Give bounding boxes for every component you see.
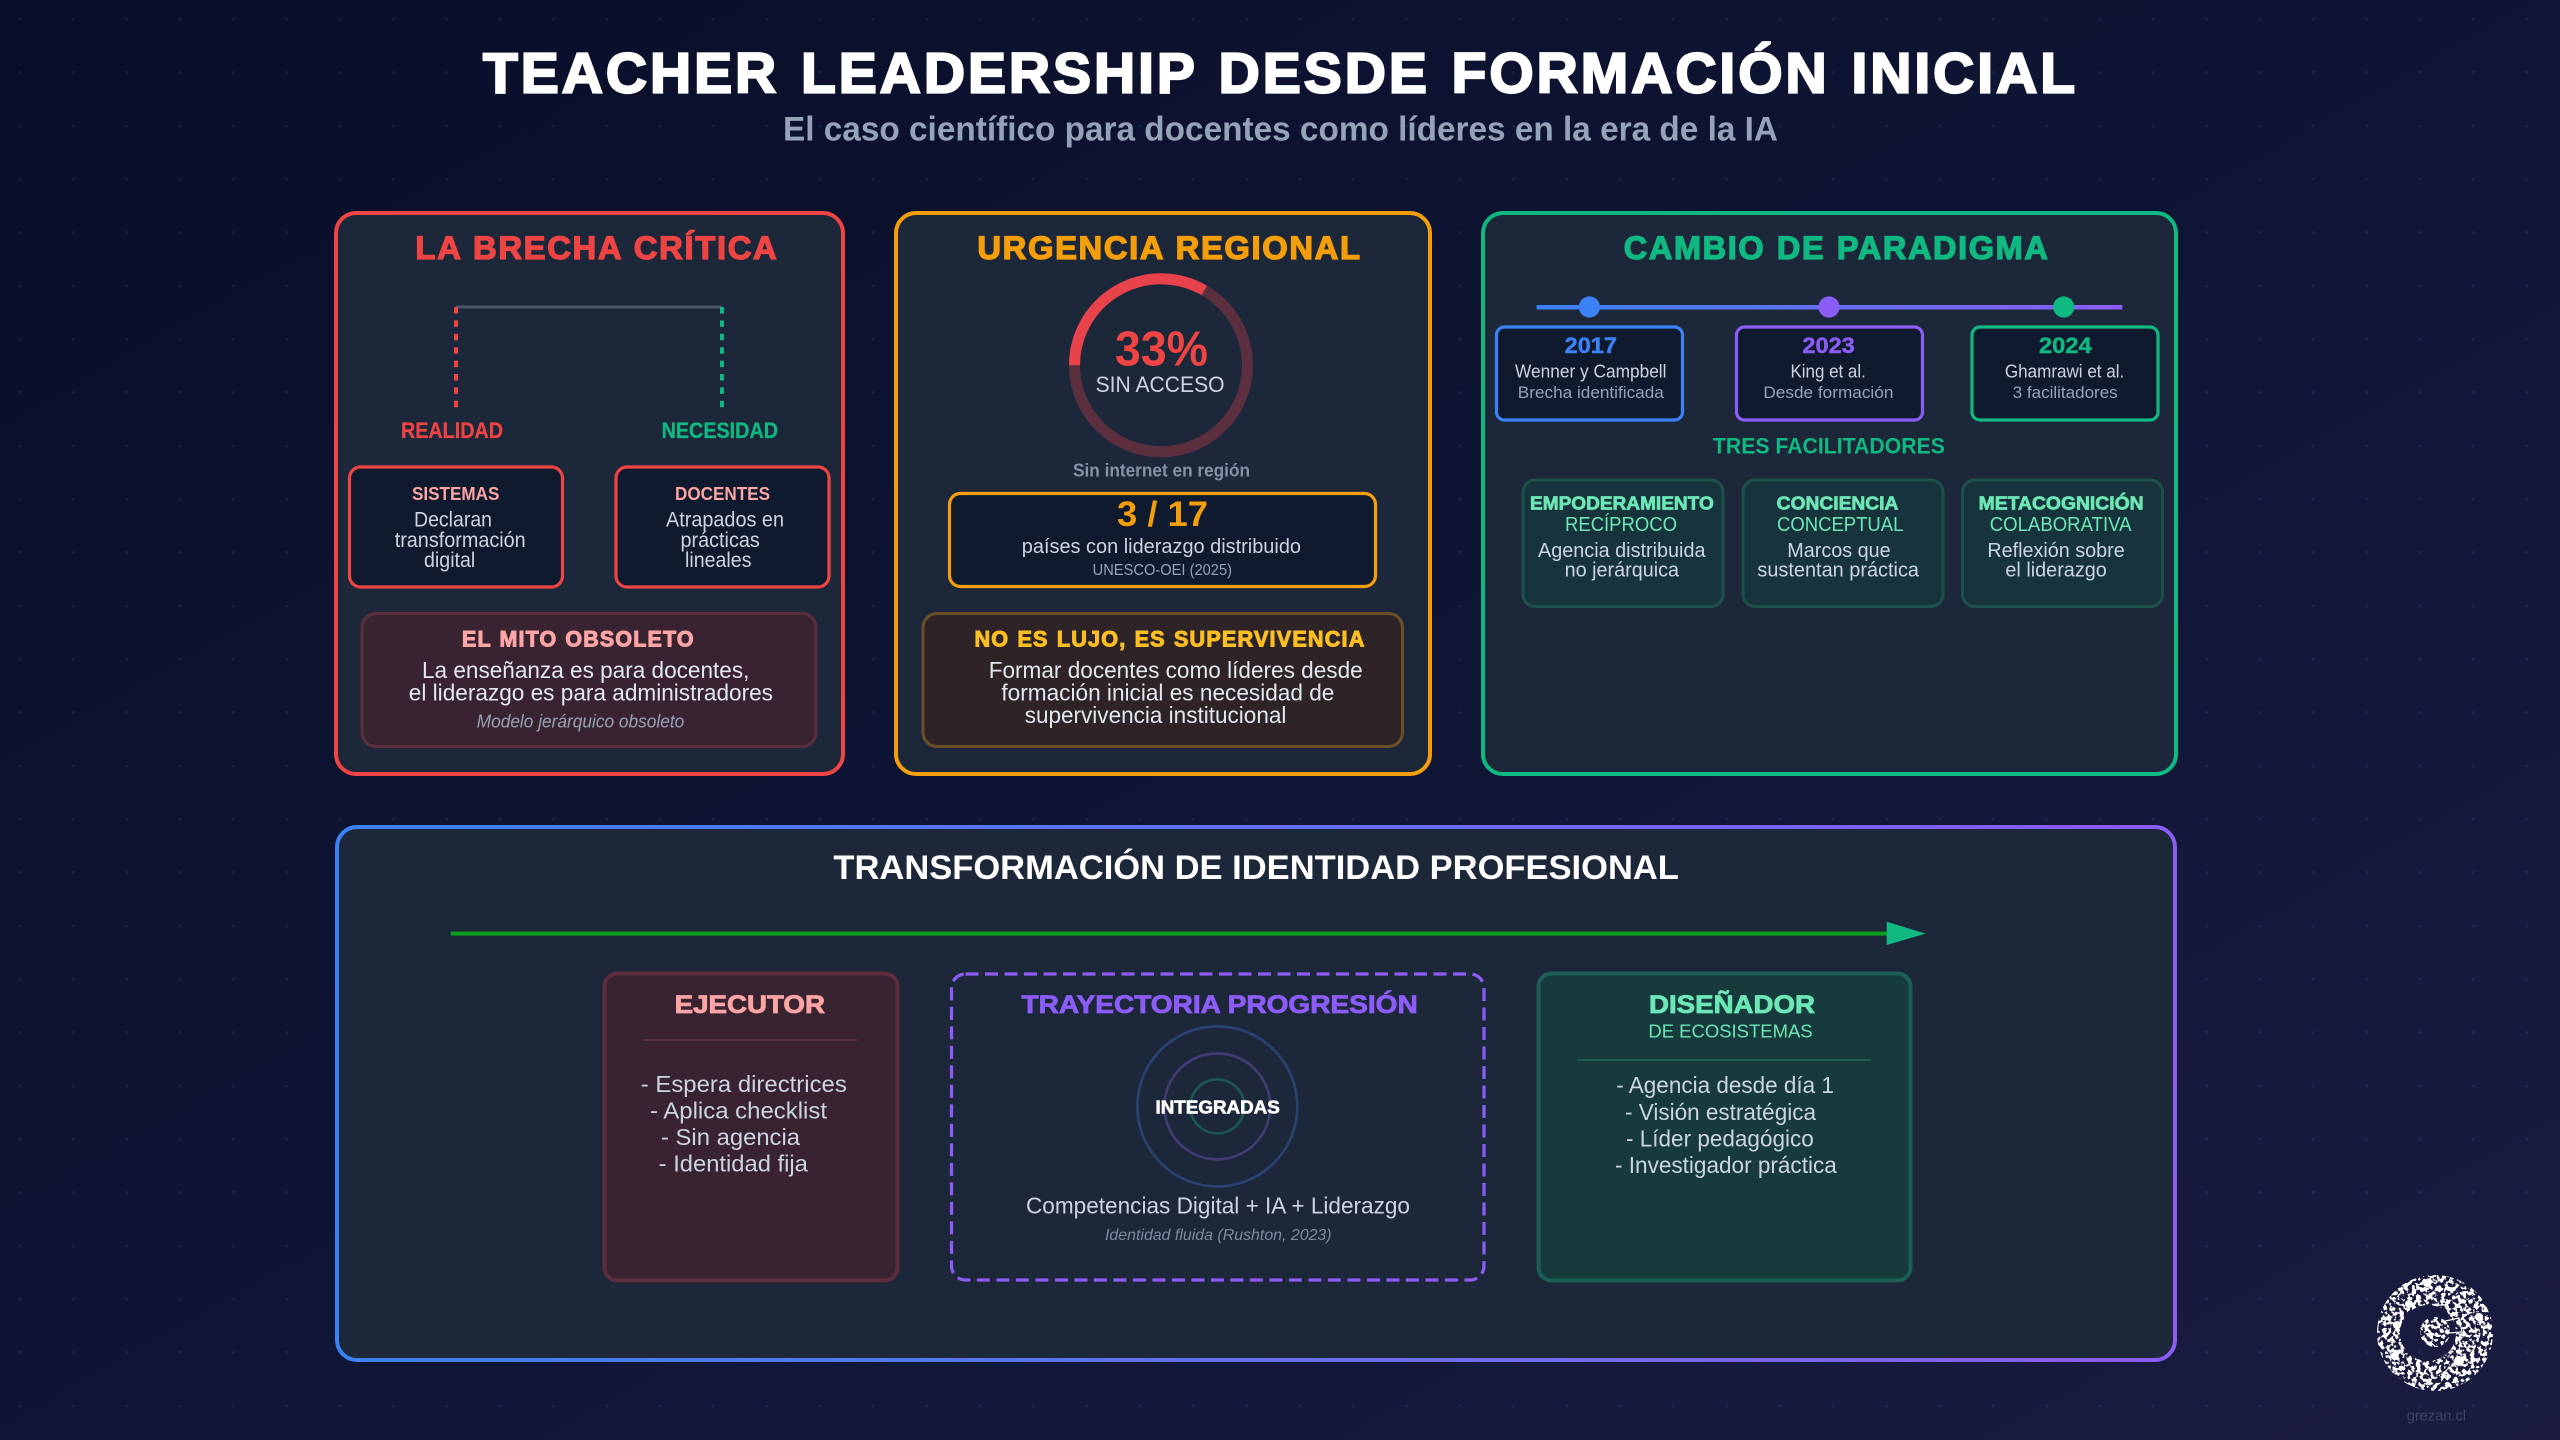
card: sistemas <box>350 467 562 587</box>
card: empoderamiento: Agencia distribuida <box>1538 540 1706 562</box>
card: trayectoria progresión <box>952 974 1484 1280</box>
stat card: 3 / 17: países con liderazgo distribuido <box>1022 536 1301 558</box>
donut chart: 33% <box>1074 279 1248 452</box>
card: empoderamiento <box>1523 480 1723 606</box>
timeline card: 2023: 2023 <box>1802 333 1855 358</box>
label: realidad: REALIDAD <box>401 418 503 443</box>
card: trayectoria progresión: TRAYECTORIA PROGRESIÓN <box>1022 989 1418 1019</box>
callout: el mito obsoleto: La enseñanza es para docentes, <box>422 657 749 683</box>
panel: transformación de identidad <box>337 827 2175 1360</box>
stat card: 3 / 17 <box>950 494 1376 586</box>
heading: la brecha crítica: LA BRECHA CRÍTICA <box>415 230 778 266</box>
timeline card: 2024: 2024 <box>2039 333 2093 358</box>
callout: no es lujo: supervivencia institucional <box>1025 702 1286 728</box>
card: docentes <box>616 467 829 587</box>
card: sistemas: Declaran <box>414 509 492 532</box>
timeline card: 2023 <box>1736 327 1922 420</box>
card: diseñador: DISEÑADOR <box>1649 989 1815 1019</box>
callout: no es lujo: formación inicial es necesidad de <box>1001 680 1334 706</box>
card: ejecutor <box>604 974 898 1280</box>
card: diseñador <box>1538 974 1910 1280</box>
card: metacognición: Reflexión sobre <box>1987 540 2125 562</box>
arrow: progression <box>451 922 1926 945</box>
card: empoderamiento: RECÍPROCO <box>1565 513 1677 536</box>
card: trayectoria progresión: Identidad fluida (Rushton, 2023) <box>1105 1227 1332 1244</box>
card: conciencia: CONCIENCIA <box>1777 492 1898 513</box>
subheading: tres facilitadores: TRES FACILITADORES <box>1713 434 1945 459</box>
card: docentes: lineales <box>685 549 752 572</box>
card: sistemas: digital <box>424 549 475 572</box>
heading: urgencia regional: URGENCIA REGIONAL <box>977 230 1362 266</box>
callout: el mito obsoleto: EL MITO OBSOLETO <box>462 626 695 651</box>
card: ejecutor: - Aplica checklist <box>650 1098 828 1124</box>
timeline card: 2017: 2017 <box>1565 333 1617 358</box>
title: TEACHER LEADERSHIP DESDE FORMACIÓN INICIAL <box>483 42 2078 106</box>
timeline card: 2017: Brecha identificada <box>1518 383 1664 402</box>
card: empoderamiento: no jerárquica <box>1565 559 1680 581</box>
stat card: 3 / 17: 3 / 17 <box>1117 495 1208 534</box>
card: diseñador: - Líder pedagógico <box>1626 1125 1814 1151</box>
caption: sin internet: Sin internet en región <box>1073 461 1250 481</box>
card: conciencia <box>1743 480 1943 606</box>
callout: no es lujo <box>923 614 1402 746</box>
heading: transformación de identidad profesional: TRANSFORMACIÓN DE IDENTIDAD PROFESIONAL <box>833 849 1679 887</box>
card: conciencia: sustentan práctica <box>1757 559 1920 581</box>
panel: urgencia regional <box>896 213 1430 774</box>
callout: el mito obsoleto <box>362 614 816 746</box>
donut chart: 33%: SIN ACCESO <box>1096 372 1225 397</box>
card: ejecutor: - Identidad fija <box>659 1150 808 1176</box>
callout: no es lujo: Formar docentes como líderes desde <box>989 657 1363 683</box>
timeline card: 2024 <box>1972 327 2158 420</box>
card: metacognición: el liderazgo <box>2005 559 2107 581</box>
card: diseñador: - Visión estratégica <box>1625 1099 1816 1125</box>
stat card: 3 / 17: UNESCO-OEI (2025) <box>1093 562 1232 579</box>
gap bracket diagram <box>456 307 722 408</box>
card: metacognición <box>1962 480 2162 606</box>
heading: cambio de paradigma: CAMBIO DE PARADIGMA <box>1624 230 2049 266</box>
label: necesidad: NECESIDAD <box>662 418 778 443</box>
concentric circles: integradas <box>1137 1026 1297 1186</box>
card: conciencia: Marcos que <box>1787 540 1891 562</box>
card: metacognición: METACOGNICIÓN <box>1979 492 2144 513</box>
card: diseñador: - Investigador práctica <box>1615 1152 1837 1178</box>
timeline card: 2024: Ghamrawi et al. <box>2005 362 2124 382</box>
timeline card: 2017 <box>1496 327 1682 420</box>
card: ejecutor: - Sin agencia <box>661 1124 800 1150</box>
panel: la brecha crítica <box>336 213 843 774</box>
callout: el mito obsoleto: Modelo jerárquico obsoleto <box>477 712 684 732</box>
card: sistemas: transformación <box>395 529 526 552</box>
timeline card: 2024: 3 facilitadores <box>2013 383 2118 402</box>
credit: grezan.cl: grezan.cl <box>2407 1408 2466 1425</box>
timeline card: 2017: Wenner y Campbell <box>1515 362 1666 382</box>
card: diseñador: - Agencia desde día 1 <box>1616 1072 1834 1098</box>
card: docentes: DOCENTES <box>675 483 770 504</box>
timeline <box>1537 296 2122 318</box>
timeline card: 2023: Desde formación <box>1763 383 1893 402</box>
card: ejecutor: - Espera directrices <box>641 1071 847 1097</box>
panel: cambio de paradigma <box>1483 213 2176 774</box>
logo: grezan network circle <box>2376 1274 2494 1392</box>
donut chart: 33%: 33% <box>1115 323 1208 377</box>
card: sistemas: SISTEMAS <box>412 483 499 504</box>
card: diseñador: DE ECOSISTEMAS <box>1648 1022 1813 1042</box>
card: ejecutor: EJECUTOR <box>675 991 825 1019</box>
subtitle: El caso científico para docentes como líderes en la era de la IA <box>783 111 1778 149</box>
callout: no es lujo: NO ES LUJO, ES SUPERVIVENCIA <box>974 626 1366 651</box>
card: metacognición: COLABORATIVA <box>1990 514 2132 536</box>
timeline card: 2023: King et al. <box>1790 362 1866 382</box>
concentric circles: integradas: INTEGRADAS <box>1156 1098 1280 1118</box>
card: empoderamiento: EMPODERAMIENTO <box>1530 492 1714 513</box>
card: docentes: Atrapados en <box>666 509 784 532</box>
card: trayectoria progresión: Competencias Digital + IA + Liderazgo <box>1026 1193 1410 1219</box>
card: conciencia: CONCEPTUAL <box>1777 514 1903 536</box>
callout: el mito obsoleto: el liderazgo es para administradores <box>409 680 773 706</box>
card: docentes: prácticas <box>680 529 760 552</box>
